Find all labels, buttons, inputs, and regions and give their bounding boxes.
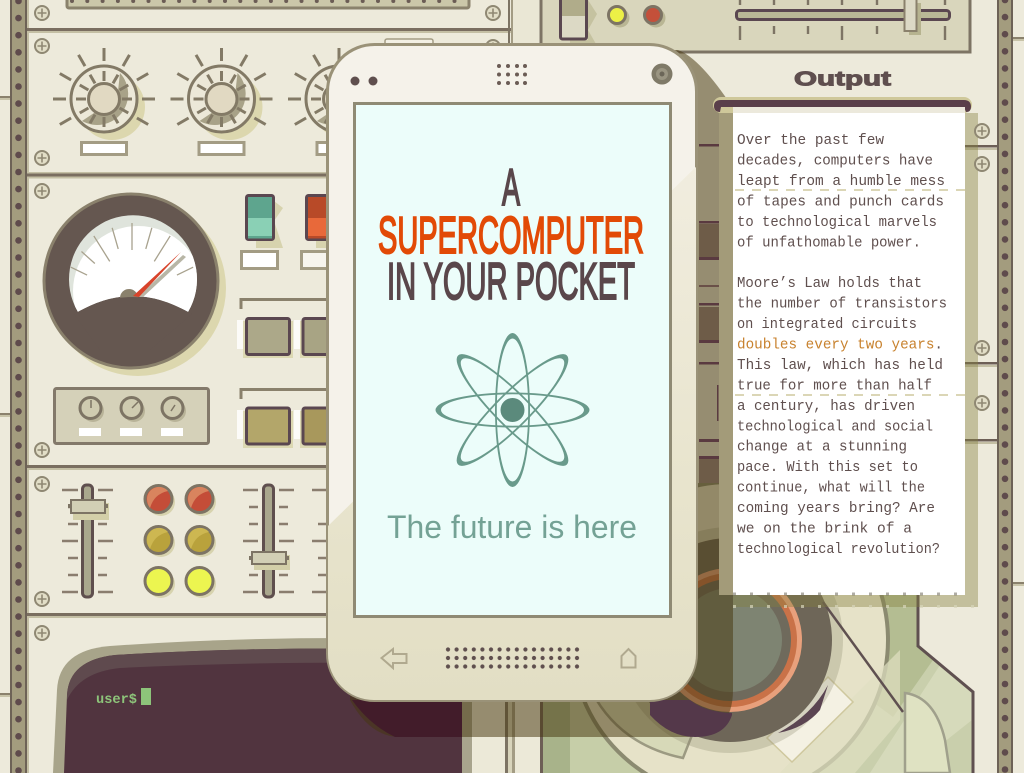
paper body text: Over the past few bbox=[737, 133, 884, 149]
paper body text: to technological marvels bbox=[737, 215, 937, 231]
paper body text: coming years bring? Are bbox=[737, 501, 935, 517]
white diamond plate bbox=[767, 677, 853, 762]
large rotary dial rings bbox=[572, 482, 950, 773]
paper body text: of tapes and punch cards bbox=[737, 194, 944, 210]
left rack rail bbox=[10, 0, 29, 773]
phone drop shadow bbox=[350, 50, 733, 737]
paper body text: decades, computers have bbox=[737, 154, 933, 170]
paper body text: we on the brink of a bbox=[737, 522, 912, 538]
rear machinery strips bbox=[473, 700, 670, 773]
camera lens bbox=[652, 64, 672, 84]
home button bbox=[622, 649, 636, 668]
front sensor dots bbox=[350, 76, 378, 86]
printer slot bbox=[713, 97, 972, 113]
paper body text: true for more than half bbox=[737, 378, 932, 394]
rocker switches bbox=[242, 196, 342, 268]
phone body bbox=[328, 44, 696, 700]
right cream column and dividers bbox=[965, 37, 1024, 586]
small trim knobs panel bbox=[54, 388, 208, 444]
paper body text: continue, what will the bbox=[737, 481, 925, 497]
paper body text: technological revolution? bbox=[737, 542, 940, 558]
left outer strip panels bbox=[0, 96, 11, 697]
dark terminal shade and dial wedges bbox=[352, 685, 828, 737]
inner curved panel bbox=[905, 693, 950, 773]
phone screen bbox=[354, 104, 670, 616]
paper body text: the number of transistors bbox=[737, 297, 947, 313]
back button bbox=[382, 649, 406, 668]
top right control panel bbox=[508, 0, 970, 52]
indicator lamps grid bbox=[145, 486, 216, 598]
smartphone bbox=[328, 44, 700, 702]
paper body text: This law, which has held bbox=[737, 358, 943, 374]
paper body text bbox=[737, 133, 947, 558]
paper body text: doubles every two years. bbox=[737, 338, 943, 354]
paper body text: a century, has driven bbox=[737, 399, 915, 415]
paper body text: change at a stunning bbox=[737, 440, 907, 456]
bottom speaker grill bbox=[445, 647, 580, 669]
tagline: The future is here bbox=[387, 509, 637, 545]
square push buttons bbox=[237, 300, 343, 448]
terminal cursor bbox=[141, 688, 151, 705]
paper body text: technological and social bbox=[737, 419, 933, 435]
earpiece speaker bbox=[497, 64, 527, 85]
right rack rail bbox=[997, 0, 1013, 773]
panel screws bbox=[35, 6, 500, 640]
top dotted plate bbox=[67, 0, 469, 8]
paper fold dashes bbox=[735, 190, 965, 395]
analog gauge meter bbox=[44, 194, 226, 376]
output paper printout bbox=[713, 97, 978, 607]
vertical sliders bbox=[62, 485, 327, 597]
paper body text: of unfathomable power. bbox=[737, 235, 921, 251]
dial knobs row bbox=[53, 39, 433, 154]
Output label: Output bbox=[794, 68, 891, 90]
screen title: IN YOUR POCKET bbox=[387, 253, 635, 311]
atom icon bbox=[436, 333, 590, 487]
terminal monitor bbox=[53, 638, 472, 773]
right side screws bbox=[975, 124, 989, 410]
screen title: A bbox=[502, 159, 520, 217]
shadowed panel lines beside phone bbox=[699, 144, 719, 483]
panel separators bbox=[27, 28, 512, 618]
screen title bbox=[378, 159, 644, 311]
paper body text: on integrated circuits bbox=[737, 317, 917, 333]
paper body text: pace. With this set to bbox=[737, 460, 918, 476]
terminal prompt text: user$ bbox=[96, 693, 137, 708]
paper body text: Moore’s Law holds that bbox=[737, 276, 922, 292]
paper body text: leapt from a humble mess bbox=[737, 174, 945, 190]
green circuit housing bbox=[790, 590, 973, 773]
screen title: SUPERCOMPUTER bbox=[378, 207, 644, 265]
